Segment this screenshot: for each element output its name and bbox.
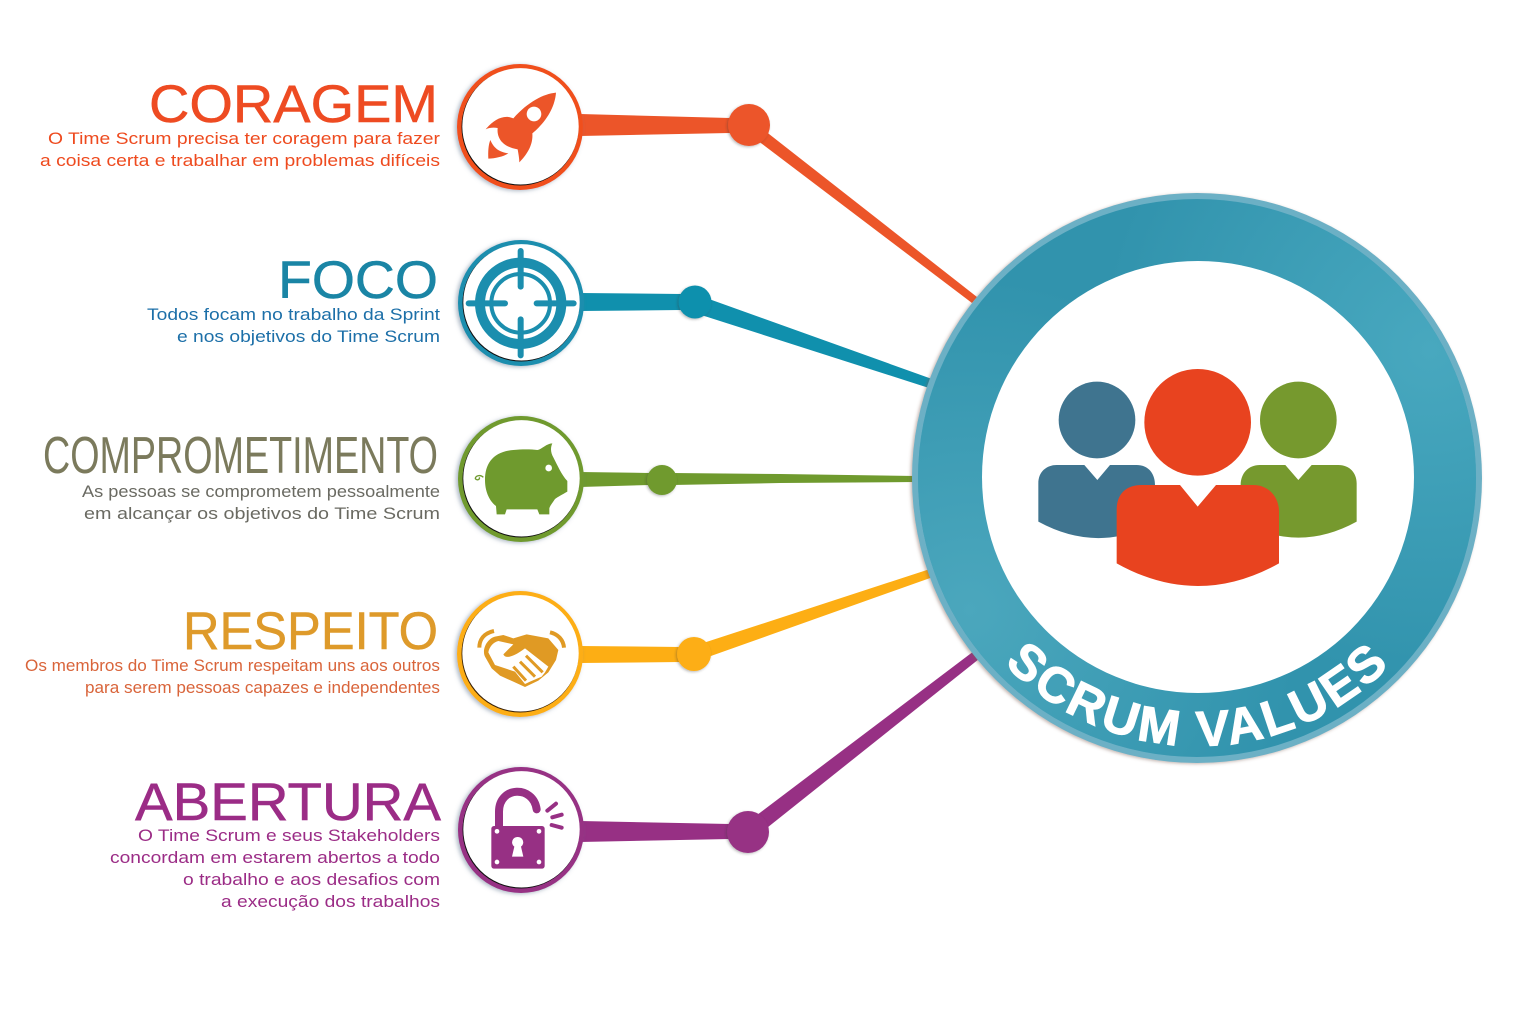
icon ring: respeito handshake [457,591,583,717]
description: abertura: a execução dos trabalhos [221,892,440,911]
description: coragem [40,129,440,170]
connector: foco [580,286,932,388]
heading: respeito: RESPEITO [183,602,438,661]
description: comprometimento: em alcançar os objetivos do Time Scrum [84,504,440,523]
description: comprometimento [82,482,440,523]
icon ring: abertura open padlock [458,767,584,893]
icon: team of three people [1038,369,1357,586]
curved label: scrum values: SCRUM VALUES [1008,644,1385,746]
heading: foco: FOCO [278,251,438,310]
text block: coragem [40,75,440,170]
icon ring: comprometimento piggy bank [458,416,584,542]
heading: abertura: ABERTURA [135,773,442,832]
connector: abertura [580,651,979,853]
icon: handshake [479,631,564,687]
description: foco: Todos focam no trabalho da Sprint [147,305,440,324]
icon: rocket [486,93,556,162]
text block: respeito [25,602,440,697]
description: respeito: Os membros do Time Scrum respeitam uns aos outros [25,656,440,675]
description: foco: e nos objetivos do Time Scrum [177,327,440,346]
description: comprometimento: As pessoas se comprometem pessoalmente [82,482,440,501]
person: green [1241,382,1357,538]
description: abertura [110,826,440,911]
description: coragem: a coisa certa e trabalhar em problemas difíceis [40,151,440,170]
description: abertura: O Time Scrum e seus Stakeholders [138,826,440,845]
icon ring: foco target [458,240,584,366]
connector: coragem [580,104,977,303]
text block: abertura [110,773,442,911]
person: blue [1038,382,1155,538]
icon ring: coragem rocket [457,64,583,190]
description: coragem: O Time Scrum precisa ter coragem para fazer [48,129,440,148]
text block: foco [147,251,440,346]
badge ring [912,193,1482,763]
connector: respeito [580,569,933,671]
description: respeito [25,656,440,697]
icon: target crosshair [469,251,574,355]
description: respeito: para serem pessoas capazes e independentes [85,678,440,697]
description: abertura: o trabalho e aos desafios com [183,870,440,889]
description: abertura: concordam em estarem abertos a todo [110,848,440,867]
heading: coragem: CORAGEM [149,75,438,134]
description: foco [147,305,440,346]
person: red [1117,369,1279,586]
connector: comprometimento [580,465,916,495]
heading: comprometimento: COMPROMETIMENTO [43,427,438,485]
text block: comprometimento [43,427,440,523]
icon: piggy bank [475,443,567,514]
central scrum values badge [908,192,1482,766]
icon: open padlock [491,792,562,869]
